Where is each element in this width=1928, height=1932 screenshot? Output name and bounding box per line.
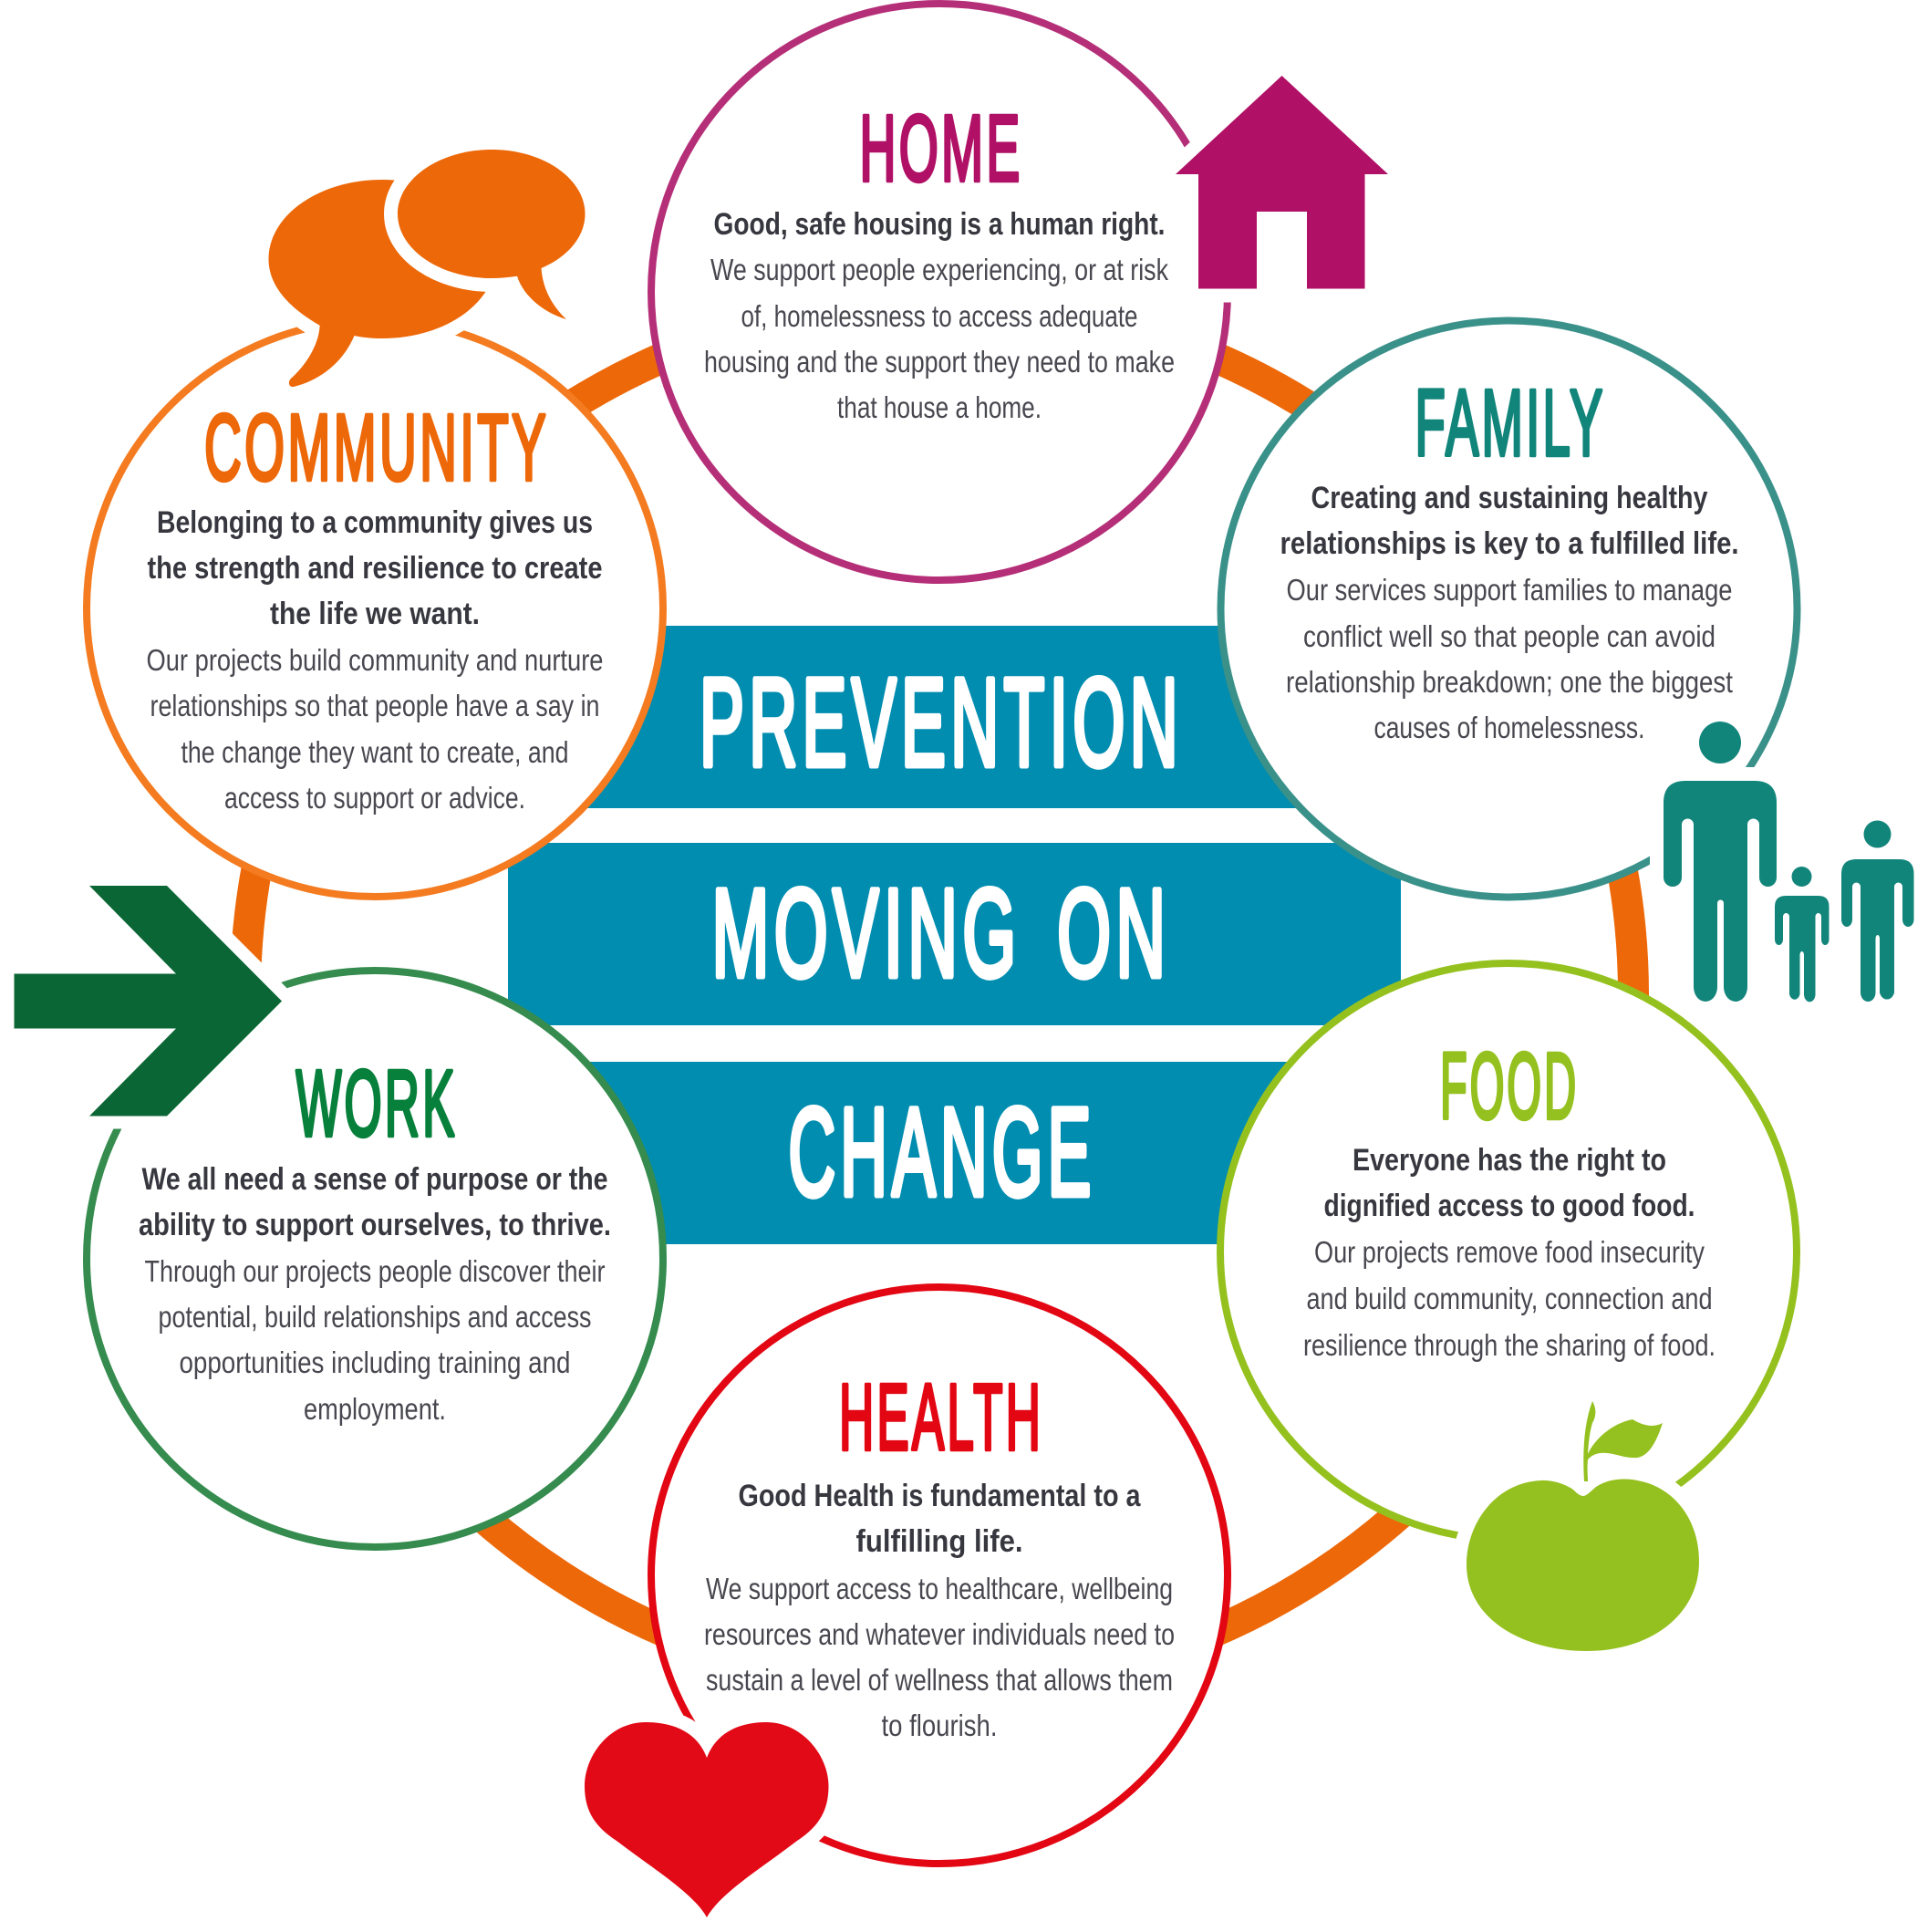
text: work: opportunities including training and (179, 1345, 571, 1379)
text: home: that house a home. (837, 390, 1042, 424)
mask behind family icon (1650, 767, 1928, 994)
text: food: Everyone has the right to (1353, 1143, 1666, 1178)
text: food: resilience through the sharing of food. (1303, 1328, 1716, 1362)
text: health: sustain a level of wellness that allows them (706, 1663, 1173, 1697)
text: family: relationship breakdown; one the biggest (1286, 665, 1733, 699)
text: home: of, homelessness to access adequate (741, 299, 1138, 333)
text: health: to flourish. (881, 1709, 998, 1742)
panel: family (1220, 321, 1928, 1002)
icon: house (1176, 76, 1388, 288)
text: food: dignified access to good food. (1324, 1189, 1695, 1223)
heading: community: COMMUNITY (204, 395, 549, 500)
text: family: causes of homelessness. (1373, 711, 1645, 744)
text: community: the strength and resilience to create (148, 551, 602, 586)
central message bars (508, 626, 1401, 1244)
icon: heart (585, 1722, 828, 1917)
text: food: and build community, connection and (1306, 1282, 1713, 1315)
panel: community (87, 150, 663, 897)
text: community: relationships so that people have a say in (150, 689, 600, 722)
bar: moving on: MOVING ON (711, 864, 1171, 1003)
bar: prevention (508, 626, 1401, 808)
text: health: Good Health is fundamental to a (739, 1479, 1141, 1513)
text: family: Creating and sustaining healthy (1311, 481, 1708, 515)
bar: moving on (508, 843, 1401, 1025)
bar: change: CHANGE (788, 1083, 1096, 1222)
text: family (1280, 481, 1738, 744)
text: family: conflict well so that people can avoid (1303, 619, 1716, 653)
text: home: housing and the support they need to make (704, 345, 1175, 379)
text: health (704, 1479, 1175, 1742)
icon: apple (1467, 1401, 1699, 1651)
panel: work (15, 886, 663, 1547)
heading: family: FAMILY (1415, 370, 1605, 475)
bar: change (508, 1062, 1401, 1244)
heading: work: WORK (295, 1051, 458, 1156)
text: health: We support access to healthcare, wellbeing (706, 1572, 1173, 1605)
text: work: We all need a sense of purpose or the (142, 1162, 607, 1197)
heading: home: HOME (859, 96, 1023, 201)
text: family: Our services support families to manage (1286, 573, 1733, 607)
icon: family (1664, 722, 1913, 1002)
text: work: potential, build relationships and access (159, 1300, 591, 1334)
text: community: the life we want. (270, 597, 480, 631)
panel: food: FOOD (1440, 1034, 1579, 1138)
panel: home (651, 4, 1388, 580)
text: health: resources and whatever individuals need to (704, 1617, 1175, 1651)
text: community: Our projects build community and nurture (146, 643, 604, 677)
text: work: ability to support ourselves, to thrive. (139, 1208, 611, 1242)
panel: health (585, 1287, 1228, 1917)
icon: arrow (15, 886, 282, 1117)
text: home: We support people experiencing, or at risk (710, 253, 1168, 286)
text: family: relationships is key to a fulfilled life. (1280, 526, 1738, 561)
text: work: employment. (304, 1392, 446, 1426)
heading: health: HEALTH (839, 1365, 1043, 1470)
text: food (1303, 1143, 1716, 1362)
text: health: fulfilling life. (855, 1524, 1023, 1559)
text: home (704, 207, 1175, 424)
text: work: Through our projects people discover their (144, 1254, 606, 1288)
icon: speech bubbles (268, 150, 586, 387)
bar: prevention: PREVENTION (700, 653, 1183, 793)
text: home: Good, safe housing is a human right. (713, 207, 1166, 242)
text: food: Our projects remove food insecurity (1314, 1235, 1705, 1269)
panel: food (1220, 963, 1797, 1651)
orange connecting ring (245, 300, 1633, 1688)
text: community: access to support or advice. (224, 781, 525, 815)
text: community: Belonging to a community gives us (157, 505, 593, 540)
text: community (146, 505, 604, 815)
text: community: the change they want to create, and (181, 735, 569, 769)
text: work (139, 1162, 611, 1426)
